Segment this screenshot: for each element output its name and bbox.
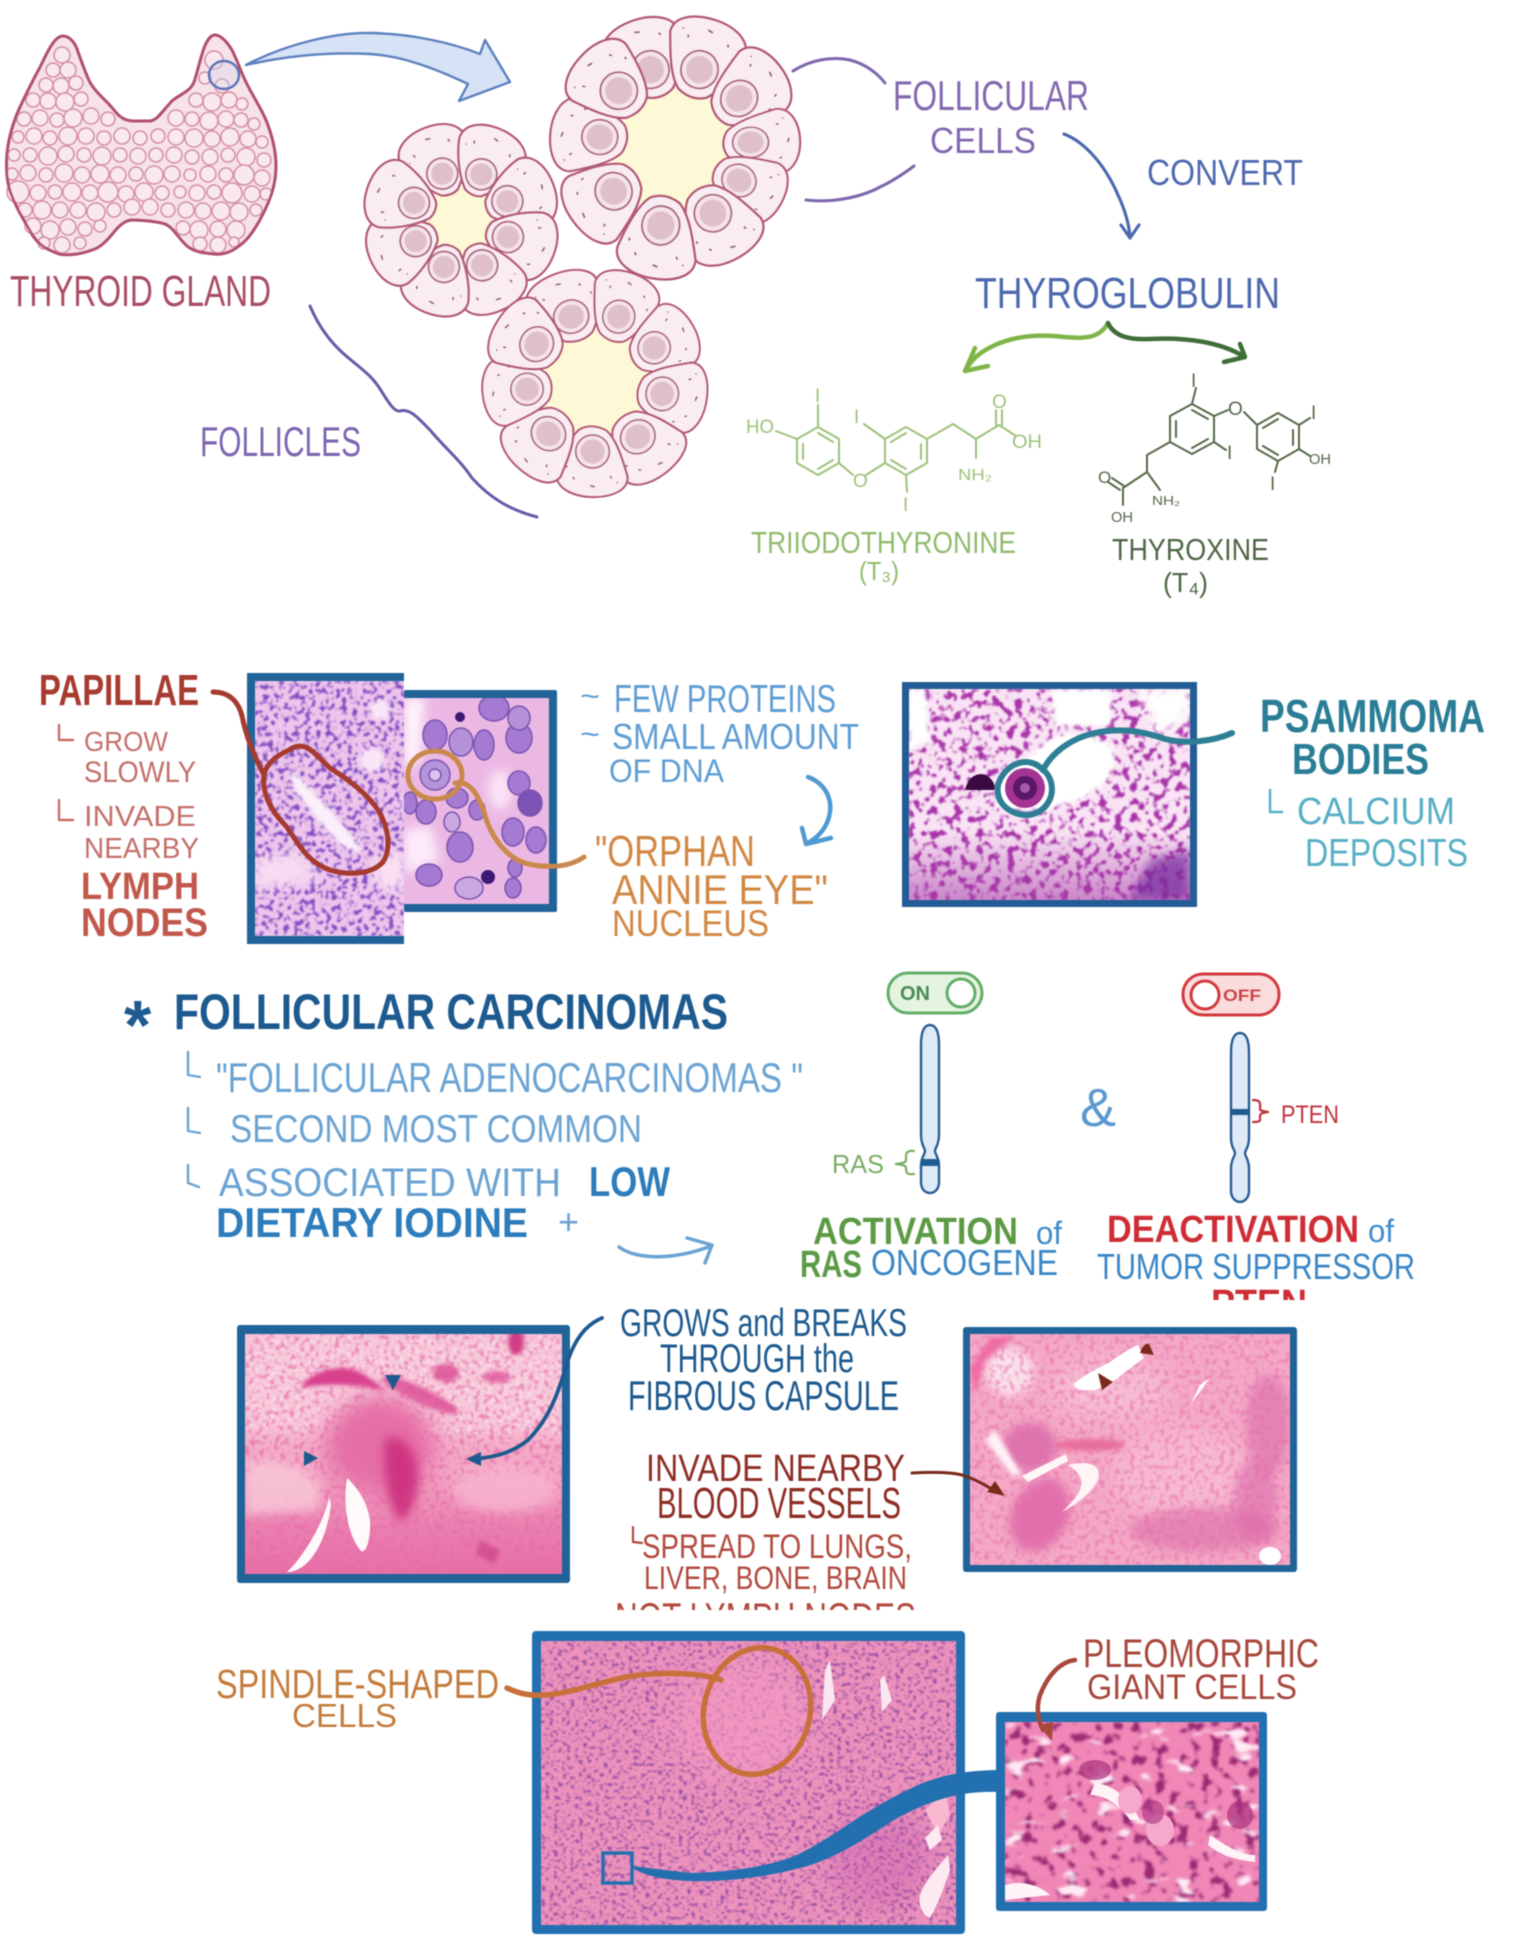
label: spindle-shaped cells: [216, 1661, 499, 1734]
molecule: triiodothyronine: [746, 386, 1042, 516]
text: activation of ras oncogene: ONCOGENE: [871, 1242, 1058, 1283]
arrow: dna to nucleus: [802, 777, 831, 844]
text: grow slowly: [59, 725, 196, 789]
panel: papillary histology: [247, 673, 404, 944]
icon: zoom circle on thyroid: [209, 61, 239, 89]
molecule: thyroxine: O: [1098, 468, 1111, 487]
text: deactivation of tumor suppressor pten: [1096, 1214, 1414, 1301]
molecule: triiodothyronine: O: [853, 471, 868, 492]
label: orphan annie eye nucleus: [595, 827, 828, 944]
text: grow slowly: SLOWLY: [84, 756, 196, 789]
label: papillae: PAPILLAE: [39, 666, 199, 715]
label: spindle-shaped cells: CELLS: [292, 1697, 397, 1734]
molecule: thyroxine: I: [1227, 443, 1232, 464]
label: orphan annie eye nucleus: ANNIE EYE": [612, 866, 828, 913]
text: few proteins small amount of dna: [580, 678, 859, 789]
label: convert: CONVERT: [1147, 152, 1303, 193]
text: deactivation of tumor suppressor pten: of: [1368, 1213, 1394, 1249]
text: associated with low dietary iodine: DIETARY IODINE: [216, 1199, 528, 1246]
text: spread to lungs liver bone brain: LIVER, BONE, BRAIN: [644, 1560, 907, 1596]
brackets: follicular cells: [793, 58, 914, 201]
icon: on switch: ON: [900, 983, 930, 1005]
icon: off switch: [1183, 974, 1279, 1015]
molecule: triiodothyronine: I: [854, 407, 859, 428]
text: invade nearby lymph nodes: NEARBY: [84, 833, 199, 865]
label: psammoma bodies: BODIES: [1292, 735, 1429, 784]
text: grows and breaks through the fibrous capsule: [620, 1302, 907, 1419]
label: pleomorphic giant cells: PLEOMORPHIC: [1083, 1632, 1319, 1676]
text: deactivation of tumor suppressor pten: TUMOR SUPPRESSOR: [1097, 1246, 1415, 1287]
label: triiodothyronine T3: [751, 525, 1016, 586]
follicle: large top right: [547, 8, 803, 285]
arrow: to T3: [965, 323, 1108, 371]
text: second most common: SECOND MOST COMMON: [230, 1108, 642, 1151]
panel: vessel invasion histology: [963, 1327, 1297, 1572]
panel: pleomorphic giant cells histology: [996, 1712, 1267, 1911]
label: ras gene: RAS: [832, 1149, 884, 1179]
molecule: thyroxine: I: [1270, 474, 1275, 495]
label: orphan annie eye nucleus: "ORPHAN: [595, 827, 755, 876]
callout: pleomorphic line: [1038, 1660, 1075, 1741]
label: pleomorphic giant cells: GIANT CELLS: [1087, 1668, 1297, 1707]
text: follicular adenocarcinomas: "FOLLICULAR ADENOCARCINOMAS ": [216, 1054, 803, 1101]
label: follicular cells: CELLS: [930, 120, 1036, 161]
text: grows and breaks through the fibrous capsule: GROWS and BREAKS: [620, 1302, 907, 1345]
heading: follicular carcinomas: *: [124, 986, 152, 1064]
molecule: thyroxine: NH₂: [1152, 493, 1180, 508]
label: psammoma bodies: [1260, 690, 1485, 784]
text: invade nearby lymph nodes: INVADE: [84, 801, 196, 833]
molecule: triiodothyronine: OH: [1012, 432, 1042, 453]
callout: orphan annie eye line: [408, 751, 584, 866]
text: grow slowly: GROW: [84, 726, 169, 757]
text: spread to lungs liver bone brain: [616, 1525, 914, 1611]
text: grows and breaks through the fibrous capsule: THROUGH the: [660, 1337, 854, 1381]
molecule: triiodothyronine: HO: [746, 417, 774, 438]
text: activation of ras oncogene: ACTIVATION: [813, 1211, 1018, 1253]
icon: chromosome ras: [921, 1025, 939, 1193]
panel: capsule invasion histology: [235, 1324, 572, 1583]
label: pleomorphic giant cells: [1083, 1632, 1319, 1707]
bracket: follicles: [310, 306, 537, 517]
panel: orphan annie nuclei histology: [403, 690, 557, 912]
label: pten gene: PTEN: [1281, 1101, 1339, 1129]
label: follicles: FOLLICLES: [200, 418, 361, 465]
icon: off switch: OFF: [1223, 986, 1261, 1005]
text: activation of ras oncogene: of: [1036, 1215, 1062, 1251]
label: thyroglobulin: THYROGLOBULIN: [975, 269, 1280, 318]
label: spindle-shaped cells: SPINDLE-SHAPED: [216, 1661, 499, 1707]
text: associated with low dietary iodine: +: [558, 1201, 579, 1242]
text: associated with low dietary iodine: [188, 1158, 670, 1246]
heading: follicular carcinomas: FOLLICULAR CARCINOMAS: [174, 984, 728, 1040]
text: grows and breaks through the fibrous capsule: FIBROUS CAPSULE: [628, 1372, 899, 1419]
label: thyroxine T4: THYROXINE: [1112, 532, 1269, 567]
panel: anaplastic histology: [532, 1631, 965, 1934]
text: few proteins small amount of dna: FEW PROTEINS: [614, 678, 836, 721]
molecule: thyroxine: [1098, 371, 1331, 526]
text: invade nearby lymph nodes: LYMPH: [81, 866, 199, 908]
arrow: convert: [1064, 134, 1139, 238]
text: few proteins small amount of dna: OF DNA: [609, 753, 725, 789]
label: pten gene: [1253, 1100, 1339, 1129]
text: associated with low dietary iodine: LOW: [589, 1158, 670, 1205]
text: invade nearby blood vessels: INVADE NEARBY: [646, 1448, 905, 1490]
label: follicular cells: FOLLICULAR: [893, 72, 1089, 119]
molecule: thyroxine: OH: [1309, 451, 1331, 468]
text: calcium deposits: [1270, 790, 1468, 875]
label: orphan annie eye nucleus: NUCLEUS: [612, 903, 769, 944]
label: thyroxine T4: [1112, 532, 1269, 598]
text: few proteins small amount of dna: ~: [580, 718, 600, 751]
molecule: triiodothyronine: NH₂: [958, 467, 992, 484]
icon: chromosome pten: [1231, 1033, 1249, 1202]
arrow: breaks through capsule: [466, 1318, 602, 1466]
text: invade nearby blood vessels: [646, 1448, 905, 1528]
text: associated with low dietary iodine: ASSOCIATED WITH: [219, 1161, 561, 1205]
text: activation of ras oncogene: [800, 1211, 1062, 1286]
text: ampersand: &: [1080, 1078, 1116, 1138]
text: deactivation of tumor suppressor pten: PTEN: [1211, 1283, 1307, 1325]
arrow: to activation: [619, 1238, 712, 1263]
label: triiodothyronine T3: (T₃): [859, 556, 899, 586]
text: invade nearby lymph nodes: NODES: [81, 901, 208, 945]
arrow: thyroid to follicles: [246, 33, 510, 101]
panel: thyroid gland drawing: [6, 35, 276, 255]
text: spread to lungs liver bone brain: NOT LYMPH NODES: [615, 1594, 916, 1641]
text: deactivation of tumor suppressor pten: DEACTIVATION: [1107, 1209, 1359, 1251]
icon: on switch: [888, 973, 982, 1013]
text: calcium deposits: DEPOSITS: [1305, 832, 1468, 875]
text: activation of ras oncogene: RAS: [800, 1244, 862, 1286]
callout: papillae line and outline: [213, 692, 388, 873]
label: triiodothyronine T3: TRIIODOTHYRONINE: [751, 525, 1016, 560]
label: follicular cells: [893, 72, 1089, 161]
arrow: vessel invasion: [912, 1472, 1005, 1496]
molecule: thyroxine: O: [1228, 399, 1243, 420]
molecule: thyroxine: OH: [1111, 509, 1133, 526]
molecule: triiodothyronine: I: [815, 386, 820, 407]
callout: psammoma circle and line: [998, 730, 1232, 815]
arrow: to T4: [1108, 323, 1245, 362]
label: ras gene: [832, 1149, 914, 1179]
follicle: small left: [356, 115, 566, 325]
molecule: triiodothyronine: I: [903, 495, 908, 516]
molecule: triiodothyronine: O: [992, 392, 1007, 413]
label: thyroid gland: THYROID GLAND: [10, 267, 271, 316]
callout: spindle cells circle and line: [507, 1636, 824, 1786]
label: thyroxine T4: (T₄): [1163, 567, 1208, 598]
text: calcium deposits: CALCIUM: [1297, 791, 1455, 833]
text: spread to lungs liver bone brain: SPREAD TO LUNGS,: [642, 1528, 912, 1566]
text: invade nearby lymph nodes: [59, 800, 208, 945]
text: few proteins small amount of dna: SMALL AMOUNT: [612, 716, 859, 757]
text: invade nearby blood vessels: BLOOD VESSELS: [657, 1479, 901, 1528]
heading: follicular carcinomas: [124, 984, 728, 1064]
molecule: thyroxine: I: [1191, 371, 1196, 392]
molecule: thyroxine: I: [1311, 403, 1316, 424]
connector: zoom band to giant cells: [632, 1770, 996, 1881]
follicle: bottom: [478, 261, 713, 498]
panel: psammoma histology: [902, 682, 1197, 907]
text: few proteins small amount of dna: ~: [580, 680, 600, 713]
